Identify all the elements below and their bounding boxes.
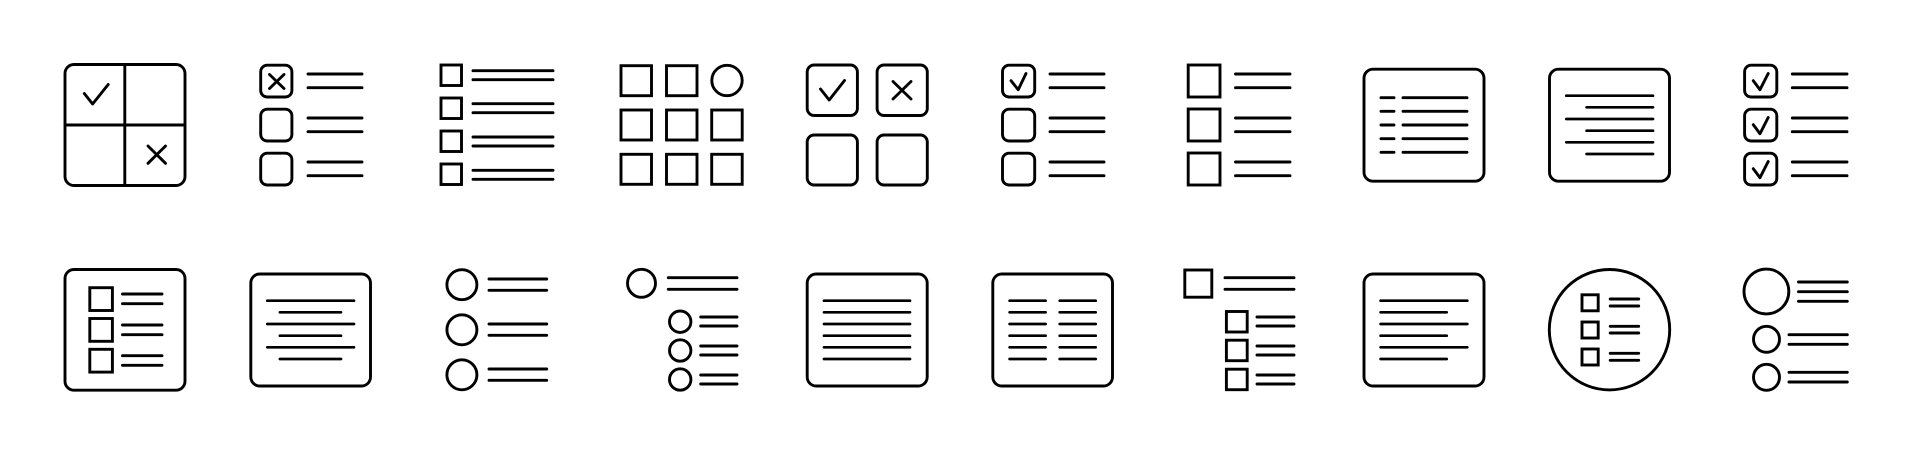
icon: document panel with right-aligned text — [1550, 69, 1670, 181]
icon: four-cell grid with check and cross — [65, 64, 185, 186]
icon: three circle bullets list — [447, 270, 547, 390]
icon: three-by-three grid with one circle — [621, 65, 742, 184]
icon: two-by-two rounded tiles with check and cross — [807, 65, 927, 185]
icon: nested circle bullets list — [628, 269, 737, 390]
icon: nested square bullets list — [1185, 270, 1294, 390]
icon: circle badge with checklist — [1549, 270, 1670, 390]
check mark — [1011, 74, 1026, 90]
icon: document panel with bulleted list — [1364, 69, 1484, 181]
check mark — [84, 84, 108, 104]
cross mark — [270, 74, 284, 88]
icon: panel with square checklist — [65, 270, 185, 390]
icon: crossed checklist with rounded boxes — [261, 65, 362, 185]
icon: document panel with two text columns — [993, 274, 1112, 386]
cross mark — [148, 146, 166, 163]
check mark — [820, 80, 844, 100]
check marks — [1753, 74, 1768, 178]
icon: one large and two small circle bullets list — [1744, 269, 1847, 390]
icon: square-box list — [1188, 65, 1290, 185]
cross mark — [893, 82, 911, 99]
icon: four-row list with small squares — [441, 65, 553, 184]
icon: document panel with left-aligned text — [1364, 274, 1484, 386]
icon: document panel with justified text — [807, 274, 927, 386]
icon: document panel with centered text — [251, 274, 370, 386]
icon: fully checked checklist — [1745, 65, 1847, 185]
icon: checklist with first box checked — [1002, 65, 1104, 185]
